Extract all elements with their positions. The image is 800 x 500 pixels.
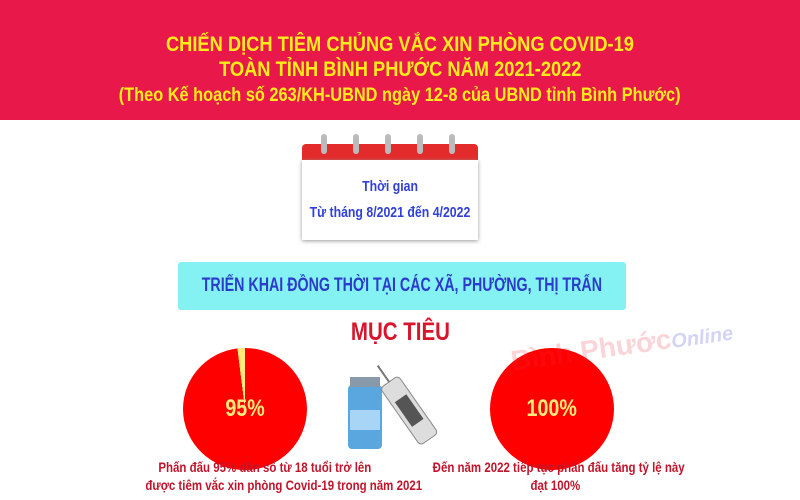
title: (Theo Kế hoạch số 263/KH-UBND ngày 12-8 của UBND tỉnh Bình Phước) (119, 85, 681, 106)
header band (0, 0, 800, 120)
text: left goal: Phấn đấu 95% dân số từ 18 tuổi trở lên (159, 459, 371, 475)
text: left goal (145, 459, 422, 493)
pie 95%: 95% (225, 395, 265, 422)
calendar text (310, 178, 470, 221)
title: TOÀN TỈNH BÌNH PHƯỚC NĂM 2021-2022 (219, 58, 581, 81)
calendar (299, 134, 481, 244)
icon: vaccine syringe (348, 365, 438, 449)
title (119, 32, 681, 106)
heading: muc tieu: MỤC TIÊU (350, 318, 450, 346)
calendar text: Thời gian (362, 178, 418, 195)
pie 95% (183, 348, 307, 470)
text: right goal (432, 459, 685, 493)
pie 100%: 100% (527, 395, 577, 422)
banner text: TRIỂN KHAI ĐỒNG THỜI TẠI CÁC XÃ, PHƯỜNG, THỊ TRẤN (202, 275, 602, 296)
watermark: Bình PhướcOnline (509, 323, 735, 376)
text: left goal: được tiêm vắc xin phòng Covid-19 trong năm 2021 (145, 477, 422, 493)
deployment banner (178, 262, 626, 310)
title: CHIẾN DỊCH TIÊM CHỦNG VẮC XIN PHÒNG COVID-19 (166, 33, 634, 56)
text: right goal: đạt 100% (530, 477, 580, 493)
pie 100% (490, 348, 614, 470)
calendar text: Từ tháng 8/2021 đến 4/2022 (310, 204, 470, 221)
text: right goal: Đến năm 2022 tiếp tục phấn đấu tăng tỷ lệ này (433, 459, 685, 475)
